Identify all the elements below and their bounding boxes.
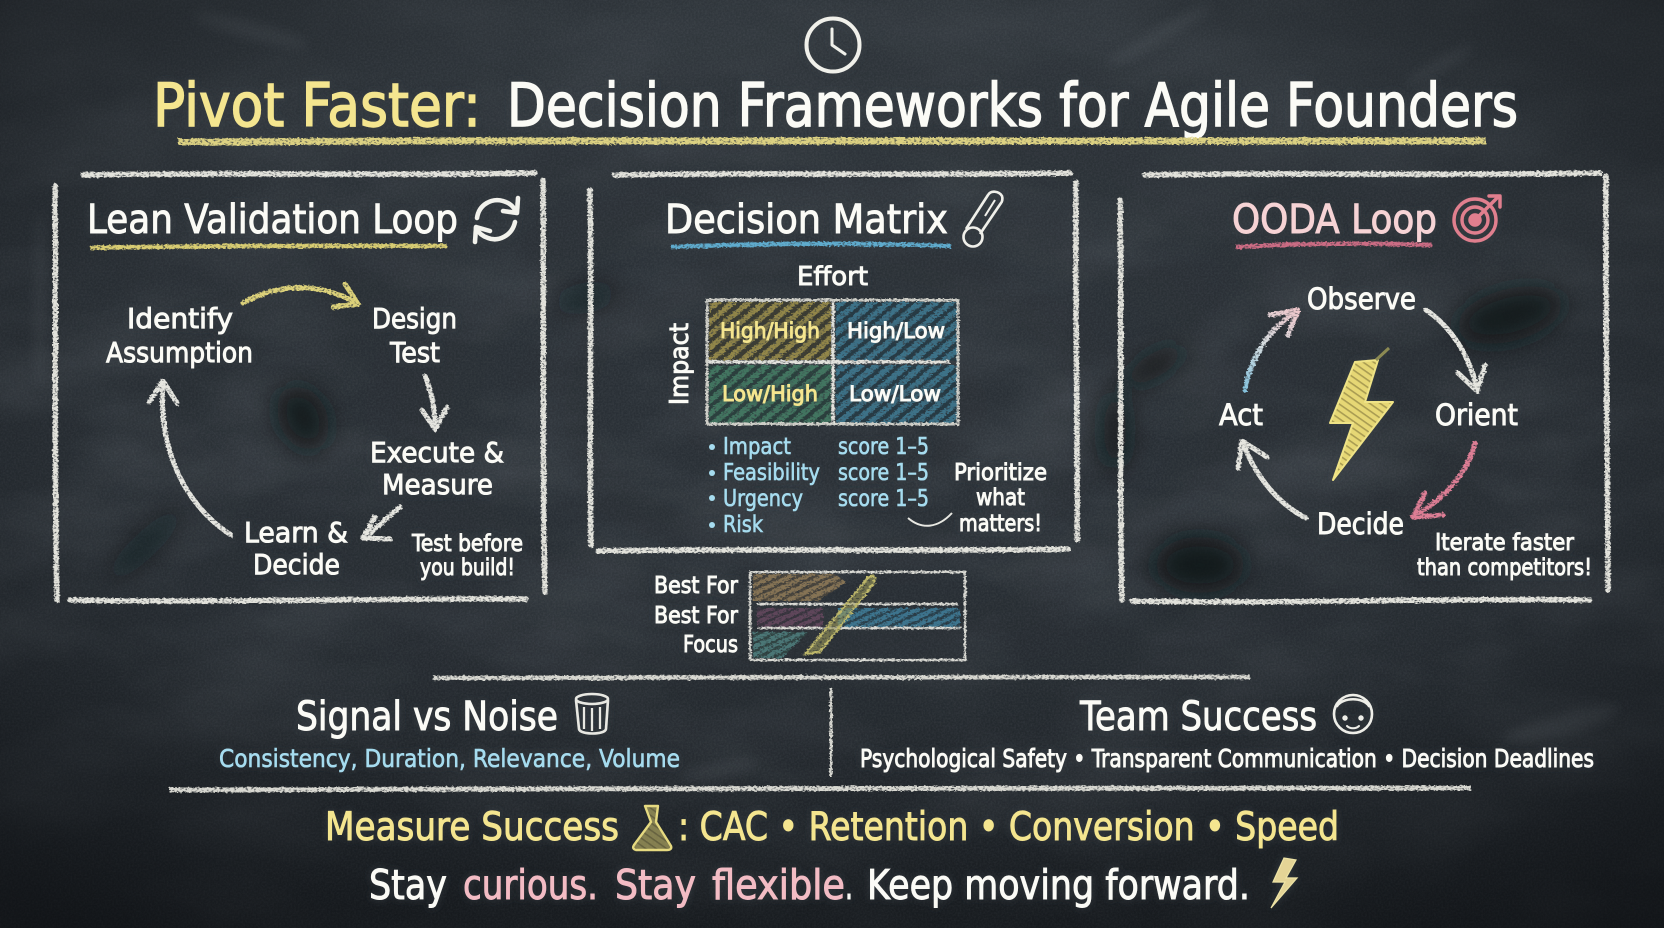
- criteria list: [709, 434, 929, 538]
- panel: ooda loop: [1120, 173, 1608, 602]
- title: [153, 71, 1518, 141]
- section: team success: [860, 694, 1594, 773]
- criteria text: Consistency, Duration, Relevance, Volume: [219, 744, 680, 773]
- step labels: Execute &: [370, 436, 504, 469]
- note: test before you build: Test before: [411, 531, 523, 557]
- arrow: identify to design: [243, 284, 358, 307]
- step labels: Observe: [1307, 282, 1416, 316]
- heading: signal vs noise: Signal vs Noise: [296, 694, 558, 740]
- measure success line: Measure Success: [325, 805, 619, 850]
- criteria list: score 1–5: [838, 460, 929, 486]
- step labels: [106, 302, 504, 581]
- chart labels: Best For: [654, 573, 738, 599]
- title: Pivot Faster:: [153, 71, 481, 141]
- closing line: Stay: [615, 861, 696, 909]
- step labels: Learn &: [244, 516, 348, 549]
- matrix grid: Low/High: [722, 382, 818, 406]
- step labels: [1219, 282, 1518, 541]
- icon: small bolt: [1271, 858, 1297, 908]
- step labels: Decide: [1317, 507, 1404, 541]
- step labels: Assumption: [106, 336, 253, 369]
- panel: decision matrix: [590, 173, 1077, 551]
- step labels: Test: [389, 336, 440, 369]
- step labels: Identify: [127, 302, 233, 335]
- heading: ooda loop: OODA Loop: [1232, 197, 1437, 243]
- section: signal vs noise: [219, 694, 680, 773]
- criteria list: Risk: [723, 512, 764, 538]
- note: test before you build: [411, 531, 523, 581]
- dividers: [169, 677, 1471, 790]
- step labels: Measure: [382, 468, 493, 501]
- criteria list: Impact: [723, 434, 791, 460]
- note: iterate faster: than competitors!: [1417, 555, 1592, 581]
- icon: refresh: [475, 198, 518, 242]
- heading: lean validation loop: Lean Validation Loop: [87, 197, 458, 243]
- chart labels: Best For: [654, 603, 738, 629]
- closing line: Keep moving forward.: [867, 861, 1250, 909]
- measure success line: [325, 805, 1339, 850]
- criteria list: score 1–5: [838, 486, 929, 512]
- heading underline: [90, 246, 447, 248]
- closing line: flexible: [712, 861, 845, 909]
- heading underline: [1236, 244, 1432, 247]
- icon: clock: [806, 18, 860, 72]
- metrics text: : CAC • Retention • Conversion • Speed: [678, 805, 1339, 850]
- closing line: Stay: [369, 861, 447, 909]
- arrow: orient to decide: [1413, 443, 1475, 517]
- panel: lean validation loop: [55, 173, 545, 601]
- arrow: design to execute: [422, 376, 447, 429]
- step labels: Design: [372, 302, 457, 335]
- closing line: [369, 858, 1297, 909]
- note: prioritize what matters: [954, 460, 1047, 537]
- arrow: execute to learn: [363, 507, 400, 539]
- matrix grid: Low/Low: [849, 382, 941, 406]
- step labels: Act: [1219, 398, 1263, 432]
- heading underline: [671, 244, 951, 247]
- note: prioritize what matters: what: [976, 485, 1025, 511]
- note: test before you build: you build!: [420, 555, 515, 581]
- icon: thermometer: [964, 192, 1002, 246]
- chart labels: [654, 573, 738, 658]
- step labels: Decide: [253, 548, 340, 581]
- icon: bin: [576, 694, 608, 734]
- criteria list: Feasibility: [723, 460, 820, 486]
- note: iterate faster: [1417, 530, 1592, 581]
- note: iterate faster: Iterate faster: [1435, 530, 1575, 556]
- matrix grid: High/Low: [847, 319, 945, 343]
- icon: lightning bolt: [1330, 348, 1393, 480]
- yellow highlighter stroke: [805, 576, 875, 654]
- note: prioritize what matters: matters!: [959, 511, 1042, 537]
- arrow: learn to identify: [149, 381, 231, 535]
- matrix grid: High/High: [720, 319, 820, 343]
- icon: target: [1454, 196, 1500, 241]
- chart labels: Focus: [683, 632, 738, 658]
- note: prioritize what matters: Prioritize: [954, 460, 1047, 486]
- axis label: impact: Impact: [665, 323, 695, 405]
- arrow: act to observe: [1245, 310, 1298, 390]
- closing line: curious.: [463, 861, 598, 909]
- title underline: [178, 141, 1486, 142]
- note curve: [908, 513, 952, 526]
- step labels: Orient: [1435, 398, 1518, 432]
- icon: flask: [633, 806, 671, 850]
- closing line: .: [845, 861, 853, 909]
- heading: decision matrix: Decision Matrix: [665, 197, 948, 243]
- matrix grid: [707, 300, 958, 424]
- criteria list: score 1–5: [838, 434, 929, 460]
- best for chart: [654, 572, 966, 660]
- heading: team success: Team Success: [1079, 694, 1317, 740]
- icon: smiling face: [1334, 695, 1372, 733]
- criteria list: Urgency: [723, 486, 803, 512]
- chart frame: [750, 572, 966, 660]
- chart bars: [753, 574, 960, 658]
- arrow: decide to act: [1238, 441, 1306, 518]
- arrow: observe to orient: [1426, 310, 1485, 391]
- axis label: effort: Effort: [797, 262, 868, 292]
